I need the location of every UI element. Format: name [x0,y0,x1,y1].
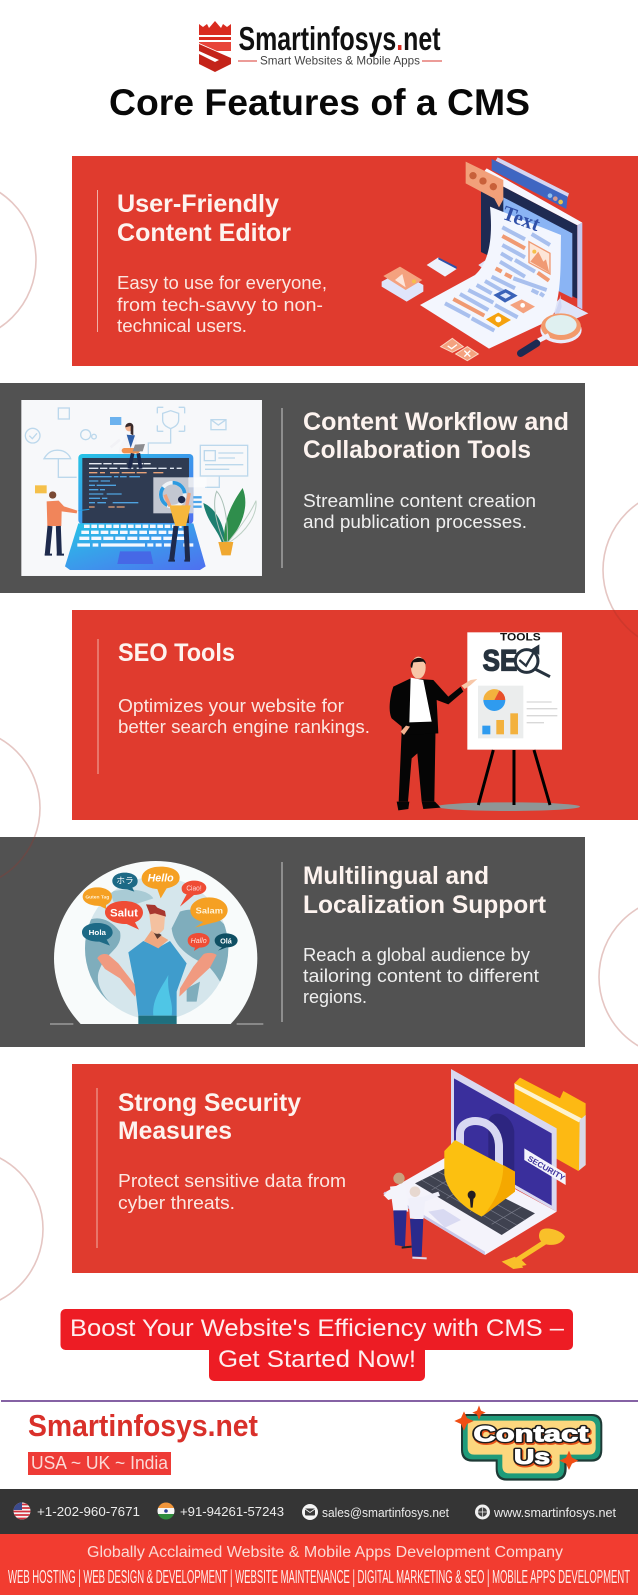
illustration: man with language bubbles: Hola [89,928,107,937]
title: Core Features of a CMS [109,82,530,123]
illustration: man with language bubbles: Ciao! [186,883,202,892]
footer brand name: Smartinfosys.net [28,1408,258,1443]
heading: seo tools: SEO Tools [118,639,235,667]
contact bar [0,1489,638,1534]
icon: shield logo [199,21,231,72]
heading: strong security measures: Strong Security [118,1089,301,1117]
text: editor description: Easy to use for everyone, [117,273,327,293]
text: security description [118,1171,346,1213]
email address: sales@smartinfosys.net [322,1505,449,1520]
illustration: presenter with seo board: TOOLS [500,631,541,643]
contact us badge: Us [514,1445,550,1469]
heading: strong security measures [118,1089,301,1145]
illustration: man with language bubbles: Salam [196,905,223,915]
decorative ring arcs [0,179,638,1309]
panel: user-friendly content editor [72,156,638,366]
text: seo description: better search engine rankings. [118,717,370,737]
cta text [70,1315,565,1373]
illustration: man with language bubbles: ホラ [116,876,134,886]
call to action [60,1309,573,1381]
illustration: laptop security padlock [383,1069,586,1269]
illustration: team around laptop [21,400,262,576]
contact us badge: Us [514,1445,550,1469]
heading: user-friendly content editor [117,190,291,247]
text: security description: Protect sensitive data from [118,1171,346,1191]
text: security description: cyber threats. [118,1193,235,1213]
website address: www.smartinfosys.net [493,1505,616,1520]
illustration: presenter with seo board [390,631,580,811]
logo wordmark: Smartinfosys.net [238,20,441,57]
text: multilingual description: regions. [303,987,367,1007]
text: editor description [117,273,327,336]
illustration: man with language bubbles: Guten Tag [85,894,110,899]
text: editor description: technical users. [117,316,247,336]
icon: us flag [14,1502,30,1520]
logo [199,20,442,72]
contact us badge: Contact [473,1422,589,1447]
text: multilingual description: Reach a global audience by [303,945,530,965]
panel: seo tools [72,610,638,820]
panel: content workflow and collaboration tools [0,383,585,593]
contact us badge: Contact [474,1423,590,1448]
phone india: +91-94261-57243 [180,1504,284,1519]
icon: india flag [158,1502,174,1520]
text: multilingual description: tailoring content to different [303,966,539,986]
heading: multilingual: Localization Support [303,891,547,919]
panel: strong security measures [72,1064,638,1273]
text: seo description: Optimizes your website for [118,696,344,716]
heading: content workflow: Content Workflow and [303,408,569,436]
services bar [0,1534,638,1595]
icon: globe [475,1504,490,1520]
illustration: man with language bubbles: Hallo [191,936,207,945]
text: seo description [118,696,370,737]
heading: content workflow: Collaboration Tools [303,436,531,464]
heading: strong security measures: Measures [118,1117,232,1145]
phone usa: +1-202-960-7671 [37,1504,140,1519]
illustration: presenter with seo board: SE [483,644,517,677]
illustration: laptop security padlock: SECURITY [526,1154,567,1183]
footer locations label: USA ~ UK ~ India [31,1453,169,1473]
illustration: man with language bubbles: Hello [148,873,174,885]
heading: multilingual: Multilingual and [303,862,489,890]
panel: multilingual and localization support [0,837,585,1056]
heading: multilingual [303,862,547,919]
text: workflow description: and publication processes. [303,512,527,532]
contact us badge [454,1405,602,1481]
text: workflow description: Streamline content creation [303,491,536,511]
logo tagline: Smart Websites & Mobile Apps [260,54,420,68]
heading: user-friendly content editor: User-Friendly [117,190,279,218]
cta text: Get Started Now! [218,1346,416,1373]
illustration: man with language bubbles [50,861,264,1024]
icon: email [302,1504,318,1520]
text: workflow description [303,491,536,532]
illustration: man with language bubbles: Salut [110,907,138,919]
illustration: man with language bubbles: Olá [220,936,233,945]
contact us badge: Us [515,1446,551,1470]
cta text: Boost Your Website's Efficiency with CMS – [70,1315,565,1342]
text: multilingual description [303,945,539,1007]
contact us badge: Contact [473,1422,589,1447]
illustration: document editor: Text [499,202,543,236]
heading: user-friendly content editor: Content Editor [117,219,291,247]
tagline: Globally Acclaimed Website & Mobile Apps Development Company [87,1544,563,1561]
heading: content workflow [303,408,569,464]
illustration: document editor [382,157,588,361]
text: editor description: from tech-savvy to non- [117,295,323,315]
